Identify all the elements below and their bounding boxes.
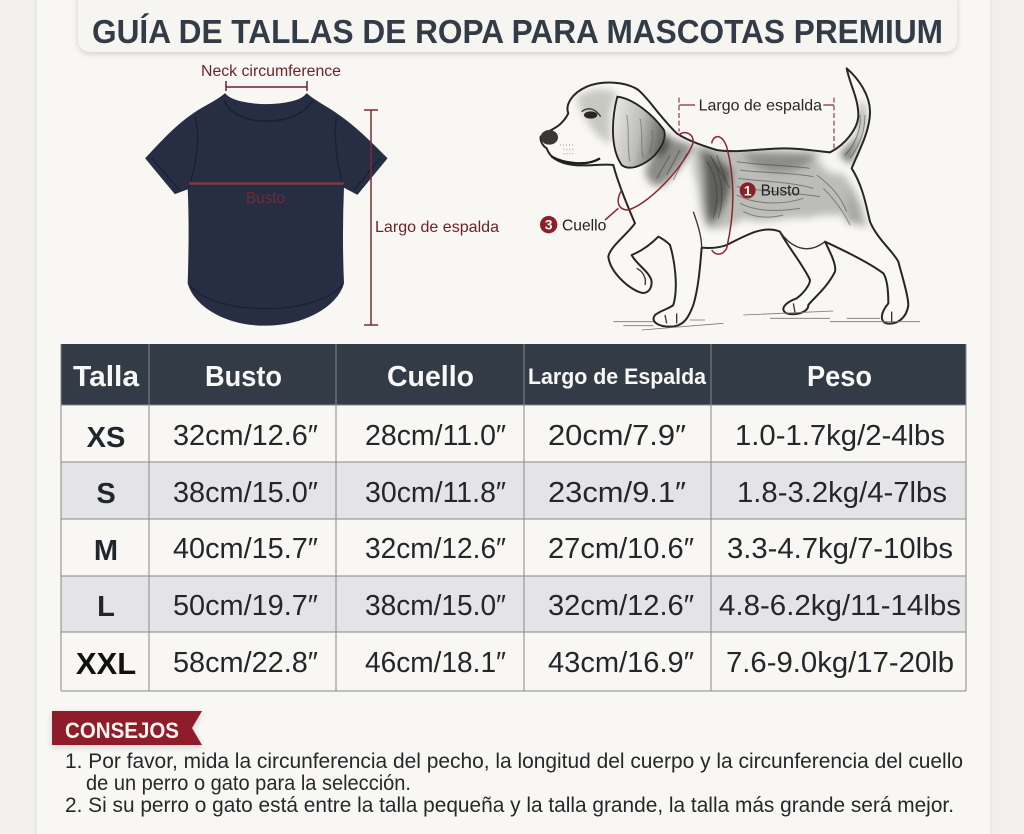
neck ring xyxy=(605,133,693,220)
table header xyxy=(61,344,966,405)
dog body xyxy=(541,68,908,327)
back length label: Largo de espalda xyxy=(699,97,822,114)
table header: Largo de Espalda xyxy=(528,364,707,389)
neck measure: Neck circumference xyxy=(201,63,341,80)
neck label xyxy=(540,216,607,234)
table values: 20cm/7.9″ xyxy=(548,420,686,452)
table header: Peso xyxy=(807,361,872,393)
table header: Talla xyxy=(73,361,140,393)
icon: navy t-shirt xyxy=(146,94,387,325)
table values: 38cm/15.0″ xyxy=(365,590,506,622)
size labels: XXL xyxy=(76,646,136,681)
ear xyxy=(613,97,665,168)
mouth xyxy=(552,157,600,163)
table header: Busto xyxy=(205,361,282,393)
consejos ribbon: CONSEJOS xyxy=(65,718,179,743)
back length measure: Largo de espalda xyxy=(375,219,499,236)
title: GUÍA DE TALLAS DE ROPA PARA MASCOTAS PREMIUM xyxy=(92,13,943,50)
table values xyxy=(173,420,961,679)
leg details xyxy=(637,212,892,323)
whisker dots xyxy=(560,145,575,154)
back length label xyxy=(679,97,834,148)
table row backgrounds xyxy=(61,405,966,691)
bust label: 1 xyxy=(744,182,752,198)
table values: 32cm/12.6″ xyxy=(365,533,506,565)
neck label: Cuello xyxy=(562,217,607,234)
table values: 58cm/22.8″ xyxy=(173,647,318,679)
icon: beagle illustration xyxy=(541,68,920,330)
bust label: Busto xyxy=(761,183,800,200)
panel: t-shirt diagram xyxy=(146,63,499,325)
table values: 50cm/19.7″ xyxy=(173,590,318,622)
table header: Cuello xyxy=(387,361,474,393)
neck label: 3 xyxy=(545,217,553,233)
size labels xyxy=(76,422,136,681)
bust label xyxy=(740,182,800,200)
size labels: L xyxy=(97,591,115,623)
tips text: 1. Por favor, mida la circunferencia del pecho, la longitud del cuerpo y la circunferencia del cuello xyxy=(65,750,963,773)
bust measure: Busto xyxy=(246,190,285,207)
ground lines xyxy=(613,311,920,330)
table values: 23cm/9.1″ xyxy=(548,477,686,509)
table values: 4.8-6.2kg/11-14lbs xyxy=(719,590,961,622)
coat shading xyxy=(577,89,868,229)
size table xyxy=(61,344,966,691)
nose xyxy=(541,130,558,145)
table values: 38cm/15.0″ xyxy=(173,477,318,509)
table values: 3.3-4.7kg/7-10lbs xyxy=(727,533,953,565)
table values: 1.8-3.2kg/4-7lbs xyxy=(737,477,947,509)
eye xyxy=(584,111,597,119)
table values: 32cm/12.6″ xyxy=(548,590,694,622)
fur hatching xyxy=(657,115,865,225)
size labels: M xyxy=(94,535,118,567)
size labels: S xyxy=(96,478,116,510)
back length measure xyxy=(364,110,499,325)
table values: 27cm/10.6″ xyxy=(548,533,694,565)
table values: 46cm/18.1″ xyxy=(365,647,506,679)
size labels: XS xyxy=(87,422,125,454)
bust ring xyxy=(712,137,733,254)
consejos ribbon xyxy=(52,711,202,745)
table values: 32cm/12.6″ xyxy=(173,420,318,452)
panel: dog diagram xyxy=(540,68,920,330)
dog outline xyxy=(541,68,908,327)
table values: 7.6-9.0kg/17-20lb xyxy=(726,647,954,679)
table values: 43cm/16.9″ xyxy=(548,647,694,679)
tips text: 2. Si su perro o gato está entre la talla pequeña y la talla grande, la talla más grande será mejor. xyxy=(65,794,954,817)
title xyxy=(78,0,957,52)
tips text xyxy=(65,750,963,817)
table values: 30cm/11.8″ xyxy=(365,477,506,509)
neck measure xyxy=(201,63,341,91)
tips text: de un perro o gato para la selección. xyxy=(86,772,411,795)
table values: 1.0-1.7kg/2-4lbs xyxy=(735,420,945,452)
table values: 40cm/15.7″ xyxy=(173,533,318,565)
table values: 28cm/11.0″ xyxy=(365,420,506,452)
